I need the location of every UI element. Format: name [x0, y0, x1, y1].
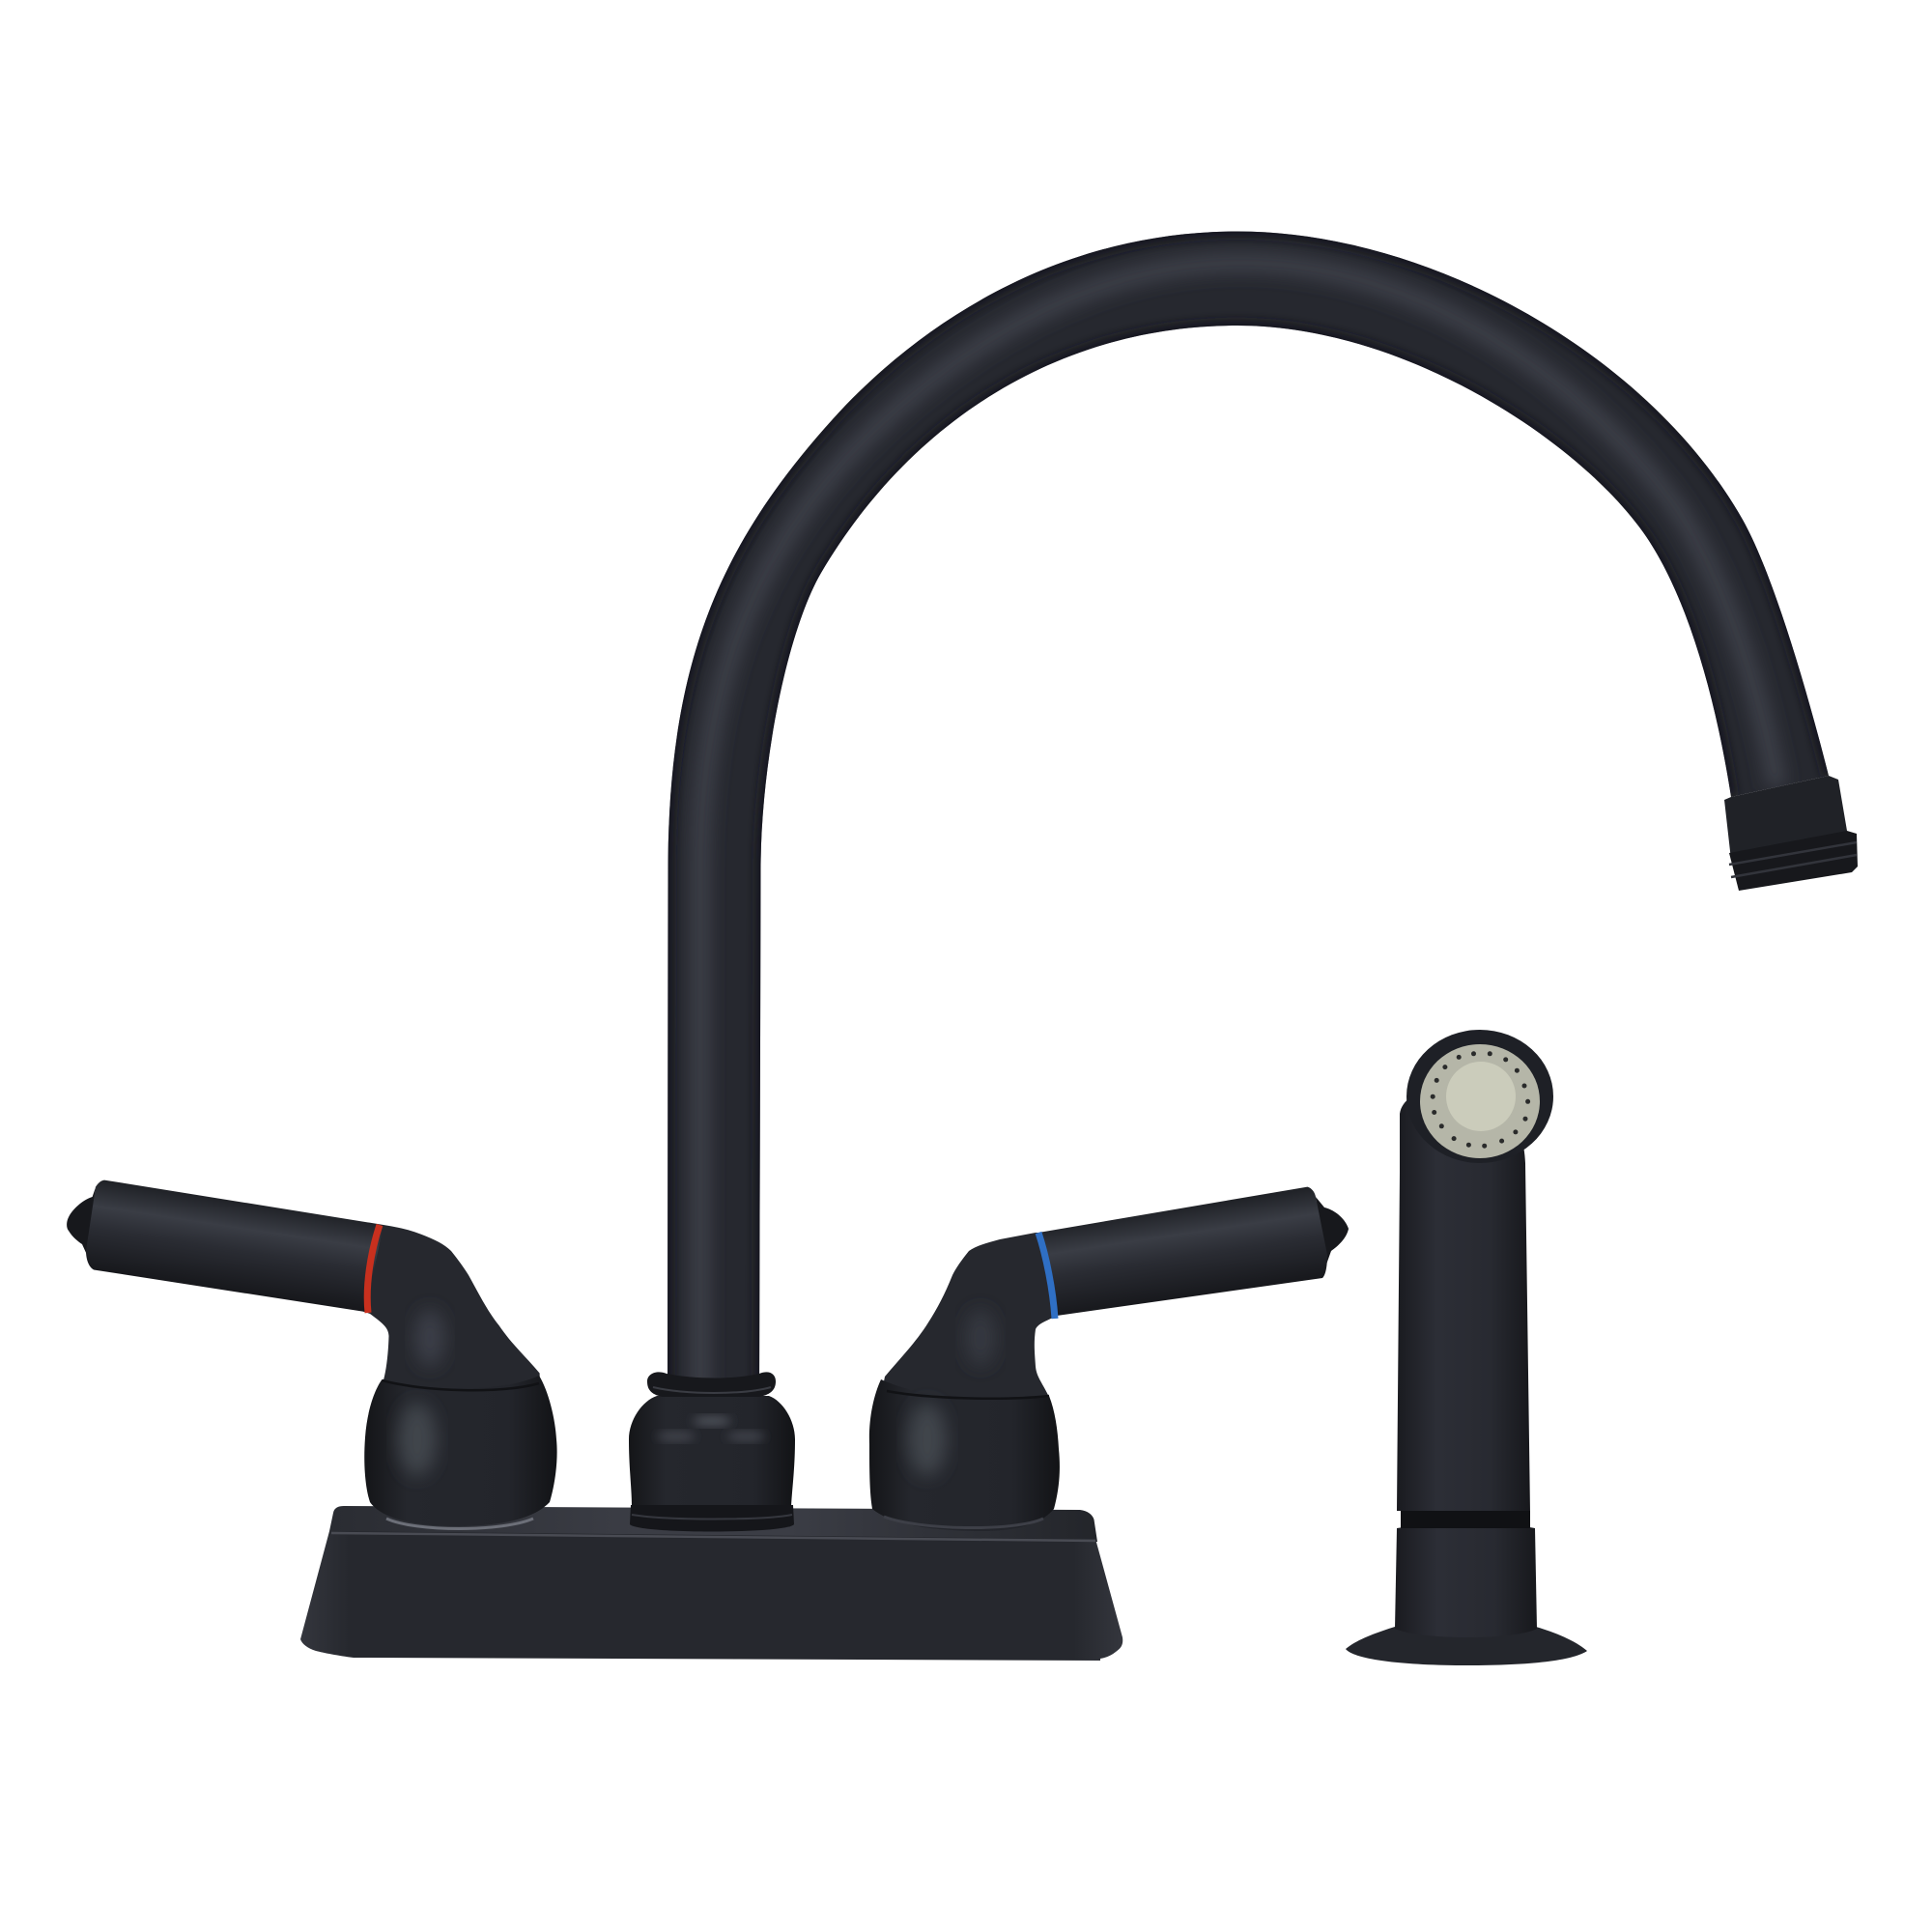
- sprayer upper body: [1397, 1082, 1530, 1513]
- lever body right: [1038, 1187, 1327, 1316]
- sprayer connector gap: [1401, 1511, 1530, 1528]
- red ring: [367, 1225, 380, 1313]
- plate top face: [329, 1506, 1097, 1542]
- collar ring: [647, 1372, 776, 1397]
- sprayer head rim: [1406, 1030, 1553, 1163]
- sprayer lower sleeve: [1395, 1524, 1537, 1637]
- sprayer button: [1446, 1062, 1516, 1131]
- deck plate base: [300, 1506, 1122, 1661]
- bottom flange: [630, 1505, 794, 1532]
- side sprayer: [1346, 1030, 1587, 1665]
- illustration: matte black two-handle faucet with side sprayer: [67, 232, 1858, 1665]
- spout nozzle: threaded end: [1724, 776, 1858, 891]
- bell body: [629, 1396, 795, 1507]
- central riser: collar and bell body: [629, 1372, 795, 1532]
- plate front face: [300, 1531, 1122, 1661]
- left valve bowl: [364, 1376, 557, 1526]
- right valve bowl: [869, 1379, 1060, 1531]
- lever knob tip left: [67, 1187, 96, 1255]
- lever hood left: [361, 1225, 540, 1403]
- lever hood right: [881, 1233, 1057, 1408]
- left handle: hot lever with red ring: [67, 1180, 557, 1528]
- lever body left: [86, 1180, 384, 1312]
- lever knob tip right: [1316, 1197, 1349, 1264]
- blue ring: [1038, 1233, 1055, 1319]
- sprayer flange: [1346, 1627, 1587, 1665]
- sprayer grey face: [1420, 1044, 1540, 1158]
- right handle: cold lever with blue ring: [869, 1187, 1349, 1531]
- spout: arched gooseneck pipe: [668, 232, 1829, 1391]
- sprayer holes: [1431, 1051, 1530, 1149]
